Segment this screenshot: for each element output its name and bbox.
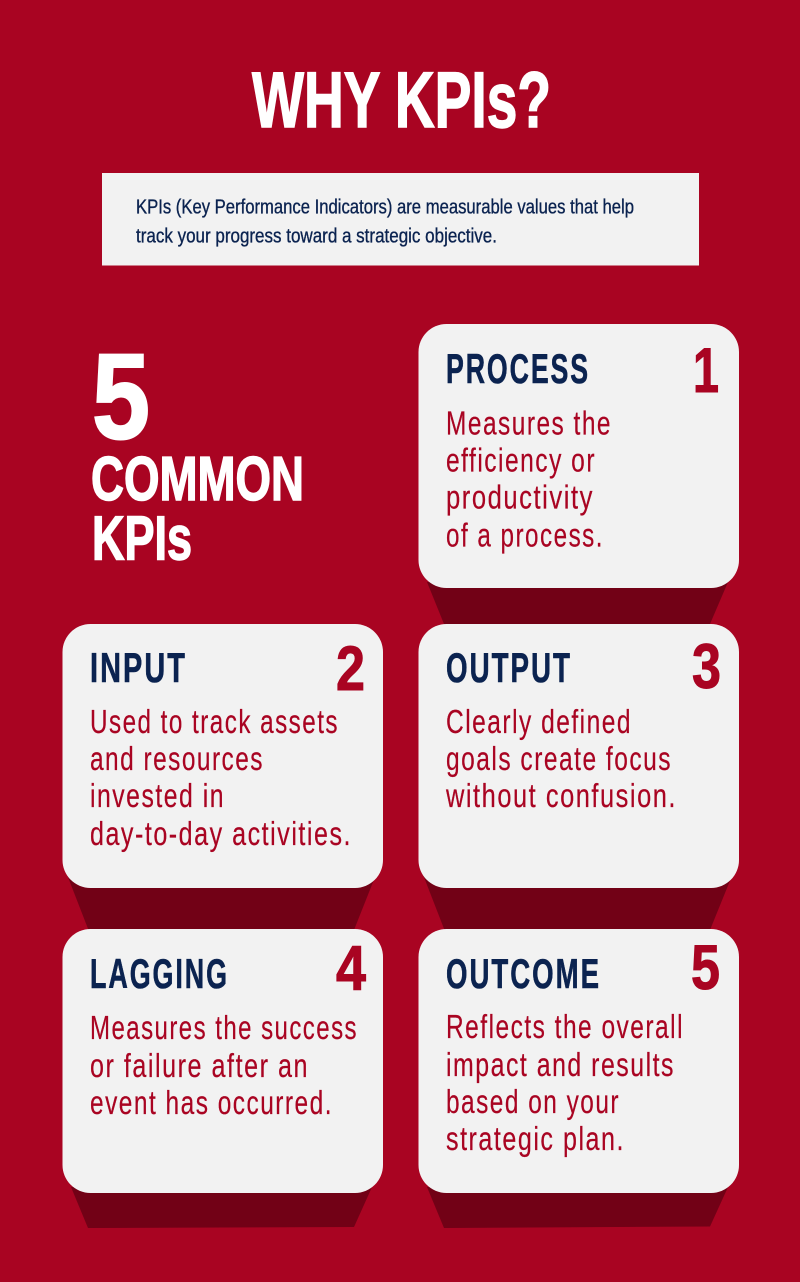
panel: input: and resources: [90, 740, 264, 777]
panel: intro definition: [102, 173, 699, 266]
panel: intro definition: track your progress toward a strategic objective.: [136, 226, 497, 248]
panel: output: 3: [692, 632, 721, 702]
heading: 5 common KPIs: [91, 328, 304, 574]
panel: process: productivity: [446, 478, 594, 516]
panel: input: day-to-day activities.: [90, 815, 352, 852]
panel: lagging: LAGGING: [90, 950, 229, 997]
panel: outcome: based on your: [446, 1083, 620, 1120]
panel: outcome: [418, 929, 739, 1228]
panel: output: OUTPUT: [446, 644, 572, 691]
heading: 5 common KPIs: KPIs: [92, 504, 192, 574]
panel: lagging: event has occurred.: [90, 1084, 333, 1121]
panel: lagging: or failure after an: [90, 1047, 309, 1084]
heading: 5 common KPIs: COMMON: [91, 445, 304, 514]
panel: process: [418, 324, 739, 624]
panel: output: without confusion.: [445, 777, 677, 814]
panel: output: Clearly defined: [446, 703, 632, 740]
panel: outcome: OUTCOME: [446, 950, 601, 997]
panel: output: goals create focus: [446, 740, 672, 777]
panel: process: PROCESS: [446, 345, 590, 392]
panel: lagging: [62, 929, 383, 1228]
panel: lagging: Measures the success: [90, 1009, 358, 1046]
panel: outcome: impact and results: [446, 1046, 675, 1083]
panel: input: 2: [336, 634, 365, 704]
title: WHY KPIs?: [252, 55, 551, 144]
panel: process: 1: [693, 336, 719, 406]
panel: outcome: 5: [691, 933, 720, 1003]
panel: input: INPUT: [90, 644, 187, 691]
panel: input: [62, 624, 383, 930]
panel: input: Used to track assets: [90, 703, 339, 740]
panel: process: of a process.: [446, 516, 604, 554]
panel: output: [418, 624, 739, 930]
panel: input: invested in: [90, 777, 225, 814]
panel: process: Measures the: [446, 404, 612, 442]
panel: outcome: Reflects the overall: [446, 1008, 684, 1045]
heading: 5 common KPIs: 5: [92, 328, 150, 464]
panel: outcome: strategic plan.: [446, 1120, 625, 1157]
panel: lagging: 4: [336, 934, 366, 1004]
panel: process: efficiency or: [446, 442, 596, 478]
panel: intro definition: KPIs (Key Performance Indicators) are measurable values that help: [136, 196, 634, 218]
